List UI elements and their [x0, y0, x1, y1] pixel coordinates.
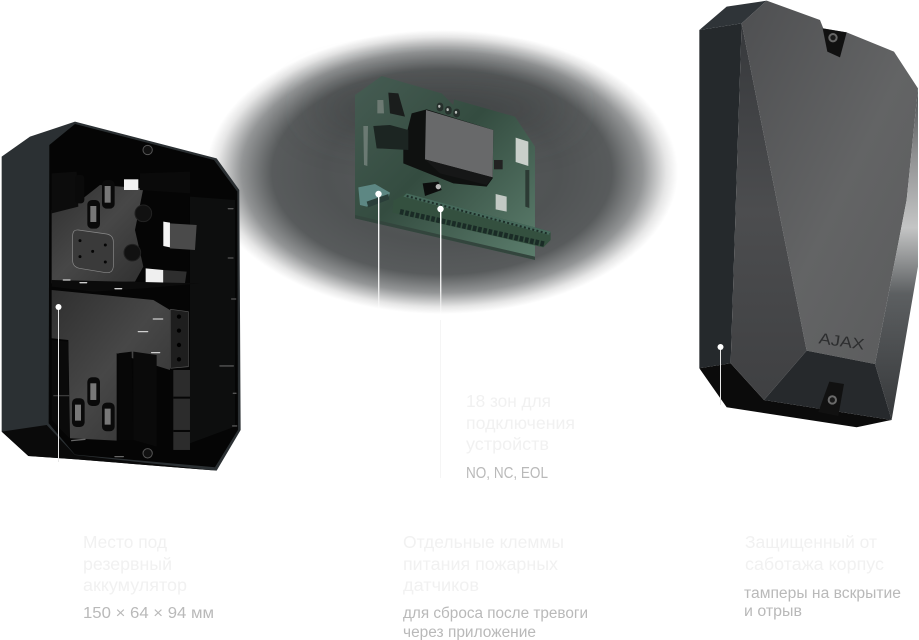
small terminal block — [358, 184, 390, 207]
case side wall — [2, 122, 241, 471]
text: battery: аккумулятор — [83, 575, 187, 595]
circuit board — [355, 76, 551, 260]
text: tamper: саботажа корпус — [745, 554, 884, 574]
text: battery — [83, 532, 214, 622]
text: zones: подключения — [466, 413, 575, 433]
light highlights — [63, 209, 237, 457]
left components — [363, 93, 503, 169]
marker: tamper — [718, 344, 724, 405]
main relay module — [403, 106, 493, 187]
text: battery: 150 × 64 × 94 мм — [83, 605, 214, 622]
text: fire sensors: питания пожарных — [403, 554, 558, 574]
text: zones — [466, 391, 575, 482]
screw posts — [124, 145, 152, 458]
case bottom edge — [2, 425, 217, 471]
text: tamper: Защищенный от — [745, 532, 877, 552]
text: fire sensors: для сброса после тревоги — [403, 605, 588, 622]
background glow — [200, 25, 690, 320]
pcb lower edge — [355, 215, 535, 260]
device: closed case, right — [699, 1, 918, 427]
pcb — [355, 76, 535, 260]
text: zones: NO, NC, EOL — [466, 465, 548, 482]
marker: fire sensor terminals — [375, 191, 382, 318]
device: open case, left — [2, 122, 241, 471]
interior ribs and slots — [52, 172, 200, 450]
text: tamper — [744, 532, 901, 620]
mounting clips — [72, 175, 115, 431]
back panel upper — [52, 185, 143, 283]
long terminal block — [393, 193, 551, 247]
case interior — [49, 124, 238, 467]
mounting plate — [73, 230, 113, 273]
text: tamper: тамперы на вскрытие — [744, 585, 901, 602]
bottom mounting hole — [818, 382, 844, 416]
text: fire sensors: датчиков — [403, 575, 479, 595]
top mounting hole — [823, 28, 847, 57]
text: zones: 18 зон для — [466, 391, 551, 411]
case left side — [699, 23, 742, 368]
text: zones: устройств — [466, 434, 549, 454]
text: battery: резервный — [83, 554, 172, 574]
front face — [742, 1, 918, 364]
case bottom — [699, 363, 892, 427]
case top-left bevel — [699, 1, 767, 30]
marker: zone terminals — [437, 206, 444, 478]
logo: AJAX — [818, 330, 865, 354]
text: fire sensors — [403, 532, 588, 640]
text: tamper: и отрыв — [744, 603, 802, 620]
text: battery: Место под — [83, 532, 167, 552]
back panel lower — [52, 290, 170, 441]
right wall shade — [190, 197, 235, 443]
front left facet — [731, 23, 807, 400]
marker: battery slot — [56, 304, 62, 462]
front bottom facet — [764, 351, 892, 420]
text: fire sensors: Отдельные клеммы — [403, 532, 564, 552]
capacitor — [423, 182, 442, 196]
front right facet — [875, 88, 918, 420]
qr labels — [496, 138, 529, 212]
